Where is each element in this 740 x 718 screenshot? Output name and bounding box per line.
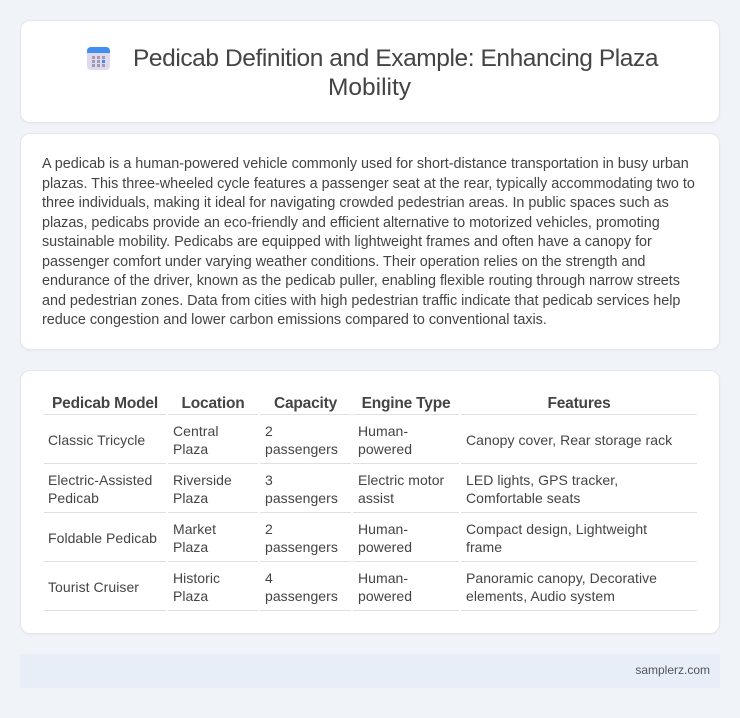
row: Tourist Cruiser: Historic xyxy=(173,570,220,586)
row: Tourist Cruiser: Tourist Cruiser xyxy=(48,579,139,595)
title: Mobility xyxy=(328,74,411,101)
row: Classic Tricycle xyxy=(48,423,672,457)
row: Electric-Assisted Pedicab xyxy=(48,472,618,506)
text block: description: plazas. This three-wheeled cycle features a passenger seat at the rear, typically accommodating two to xyxy=(42,176,695,192)
column headers xyxy=(52,395,610,412)
row: Tourist Cruiser: powered xyxy=(358,588,412,604)
row: Foldable Pedicab: Plaza xyxy=(173,539,208,555)
footer text: samplerz.com xyxy=(635,663,710,677)
panel: description xyxy=(20,133,720,350)
row: Electric-Assisted Pedicab: Pedicab xyxy=(48,490,99,506)
footer bar xyxy=(20,654,720,688)
text block: description: sustainable mobility. Pedicabs are equipped with lightweight frames and often have a canopy for xyxy=(42,234,652,250)
row: Electric-Assisted Pedicab: Comfortable seats xyxy=(466,490,580,506)
row: Electric-Assisted Pedicab: Plaza xyxy=(173,490,208,506)
row: Foldable Pedicab: Foldable Pedicab xyxy=(48,530,157,546)
column headers: Engine Type xyxy=(362,395,450,412)
text block: description: reduce congestion and lower carbon emissions compared to conventional taxis. xyxy=(42,312,547,328)
row: Foldable Pedicab: powered xyxy=(358,539,412,555)
row: Foldable Pedicab: Market xyxy=(173,521,216,537)
title: Pedicab Definition and Example: Enhancing Plaza xyxy=(133,45,658,72)
icon: calendar xyxy=(87,47,110,70)
row: Electric-Assisted Pedicab: Electric motor xyxy=(358,472,444,488)
text block: description: and pedestrian zones. Data from cities with high pedestrian traffic indicate that pedicab services help xyxy=(42,292,680,308)
row: Tourist Cruiser: Plaza xyxy=(173,588,208,604)
row: Tourist Cruiser: 4 xyxy=(265,570,273,586)
row: Electric-Assisted Pedicab: LED lights, GPS tracker, xyxy=(466,472,618,488)
row: Tourist Cruiser: Panoramic canopy, Decorative xyxy=(466,570,657,586)
row: Foldable Pedicab: frame xyxy=(466,539,502,555)
row: Classic Tricycle: Canopy cover, Rear storage rack xyxy=(466,432,672,448)
text block: description: endurance of the driver, known as the pedicab puller, enabling flexible routing through narrow streets xyxy=(42,273,680,289)
text block: description: passenger comfort under varying weather conditions. Their operation relies on the strength and xyxy=(42,254,645,270)
row: Classic Tricycle: powered xyxy=(358,441,412,457)
text block: description: three individuals, making it ideal for navigating crowded pedestrian areas. In public spaces such as xyxy=(42,195,669,211)
row: Tourist Cruiser: passengers xyxy=(265,588,338,604)
row: Foldable Pedicab: Compact design, Lightweight xyxy=(466,521,647,537)
column headers: Capacity xyxy=(274,395,337,412)
row: Tourist Cruiser xyxy=(48,570,657,604)
row: Tourist Cruiser: elements, Audio system xyxy=(466,588,615,604)
column headers: Location xyxy=(182,395,244,412)
row: Foldable Pedicab: 2 xyxy=(265,521,273,537)
column headers: Features xyxy=(547,395,610,412)
panel: title card xyxy=(20,20,720,123)
row: Electric-Assisted Pedicab: Electric-Assisted xyxy=(48,472,152,488)
column headers: Pedicab Model xyxy=(52,395,158,412)
text block: description: plazas, pedicabs provide an eco-friendly and efficient alternative to motorized vehicles, promoting xyxy=(42,214,660,230)
row: Electric-Assisted Pedicab: Riverside xyxy=(173,472,232,488)
row: Tourist Cruiser: Human- xyxy=(358,570,408,586)
row: Classic Tricycle: Plaza xyxy=(173,441,208,457)
row: Classic Tricycle: Classic Tricycle xyxy=(48,432,145,448)
row: Foldable Pedicab xyxy=(48,521,647,555)
row: Classic Tricycle: 2 xyxy=(265,423,273,439)
panel: table card xyxy=(20,370,720,634)
row: Classic Tricycle: passengers xyxy=(265,441,338,457)
row: Foldable Pedicab: passengers xyxy=(265,539,338,555)
text block: description: A pedicab is a human-powered vehicle commonly used for short-distance transportation in busy urban xyxy=(42,156,689,172)
row: Electric-Assisted Pedicab: assist xyxy=(358,490,394,506)
row: Classic Tricycle: Human- xyxy=(358,423,408,439)
row: Electric-Assisted Pedicab: passengers xyxy=(265,490,338,506)
title xyxy=(133,45,658,101)
row: Classic Tricycle: Central xyxy=(173,423,218,439)
text block: description xyxy=(42,156,695,328)
row: Electric-Assisted Pedicab: 3 xyxy=(265,472,273,488)
row: Foldable Pedicab: Human- xyxy=(358,521,408,537)
